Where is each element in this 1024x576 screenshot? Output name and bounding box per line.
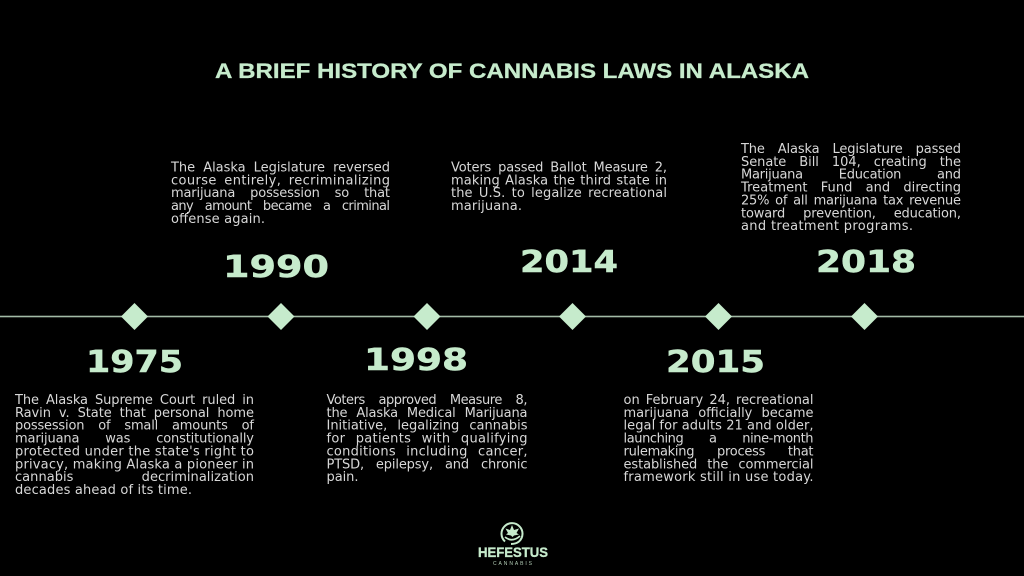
year 2015: 2015 (666, 345, 765, 380)
text block 2014: marijuana. (451, 199, 522, 214)
milestone marker 2014 (559, 303, 586, 330)
text block 2015: rulemaking process that (624, 444, 814, 459)
milestone marker 1998 (414, 303, 440, 330)
text block 2014: making Alaska the third state in (451, 173, 667, 188)
text block 1998: PTSD, epilepsy, and chronic (326, 457, 528, 472)
title: A BRIEF HISTORY OF CANNABIS LAWS IN ALASKA (215, 60, 809, 83)
text block 2018: 25% of all marijuana tax revenue (741, 193, 961, 208)
text block 1998: conditions including cancer, (326, 444, 528, 459)
text block 2014: Voters passed Ballot Measure 2, (451, 160, 667, 176)
text block 1998: Voters approved Measure 8, (326, 393, 528, 408)
text block 2018: The Alaska Legislature passed (740, 142, 961, 157)
text block 1975: decades ahead of its time. (15, 483, 192, 498)
milestone marker 1990 (268, 303, 294, 330)
text block 1975: Ravin v. State that personal home (15, 406, 254, 421)
text block 2018: Senate Bill 104, creating the (741, 155, 961, 170)
text block 1990 (170, 160, 390, 227)
text block 1998: the Alaska Medical Marijuana (326, 406, 528, 421)
text block 1975: privacy, making Alaska a pioneer in (15, 457, 254, 472)
text block 1990: course entirely, recriminalizing (171, 173, 390, 188)
text block 1975: The Alaska Supreme Court ruled in (14, 393, 254, 408)
milestone marker 2015 (705, 303, 732, 330)
text block 1975 (14, 393, 254, 498)
text block 1975: possession of small amounts of (15, 419, 254, 434)
text block 2018: Treatment Fund and directing (740, 181, 961, 196)
milestone marker 1975 (121, 303, 148, 330)
text block 2018: Marijuana Education and (741, 168, 961, 183)
text block 2015: legal for adults 21 and older, (624, 419, 814, 434)
milestone marker 2018 (851, 303, 878, 330)
text block 1998: pain. (326, 470, 358, 485)
text block 1998: for patients with qualifying (326, 432, 528, 447)
text block 1975: cannabis decriminalization (15, 470, 254, 485)
text block 1990: marijuana possession so that (171, 186, 390, 201)
logo subtitle: CANNABIS (493, 561, 533, 567)
text block 1975: marijuana was constitutionally (15, 432, 254, 447)
logo wordmark: HEFESTUS (478, 545, 548, 560)
text block 1998: Initiative, legalizing cannabis (326, 419, 528, 434)
year 1975: 1975 (86, 345, 183, 380)
text block 2018: and treatment programs. (741, 219, 913, 234)
text block 2015 (624, 393, 814, 485)
text block 2015: established the commercial (624, 457, 814, 472)
text block 2018: toward prevention, education, (741, 206, 961, 221)
text block 2015: marijuana officially became (624, 406, 814, 421)
year 2018: 2018 (816, 245, 916, 280)
logo: Hefestus Cannabis (478, 523, 548, 567)
text block 2018 (740, 142, 961, 234)
text block 2015: launching a nine-month (624, 432, 814, 447)
text block 1998 (326, 393, 528, 485)
text block 2015: framework still in use today. (624, 470, 814, 485)
text block 1990: The Alaska Legislature reversed (170, 160, 390, 176)
year 1998: 1998 (364, 343, 468, 378)
text block 1975: protected under the state's right to (15, 444, 254, 459)
text block 1990: any amount became a criminal (171, 199, 390, 214)
icon: leaf in smiling circle (502, 523, 522, 544)
timeline (0, 303, 1024, 330)
text block 1990: offense again. (171, 212, 265, 227)
text block 2014 (451, 160, 667, 214)
text block 2014: the U.S. to legalize recreational (451, 186, 667, 201)
year 1990: 1990 (223, 250, 329, 285)
year 2014: 2014 (520, 245, 618, 280)
text block 2015: on February 24, recreational (624, 393, 814, 408)
